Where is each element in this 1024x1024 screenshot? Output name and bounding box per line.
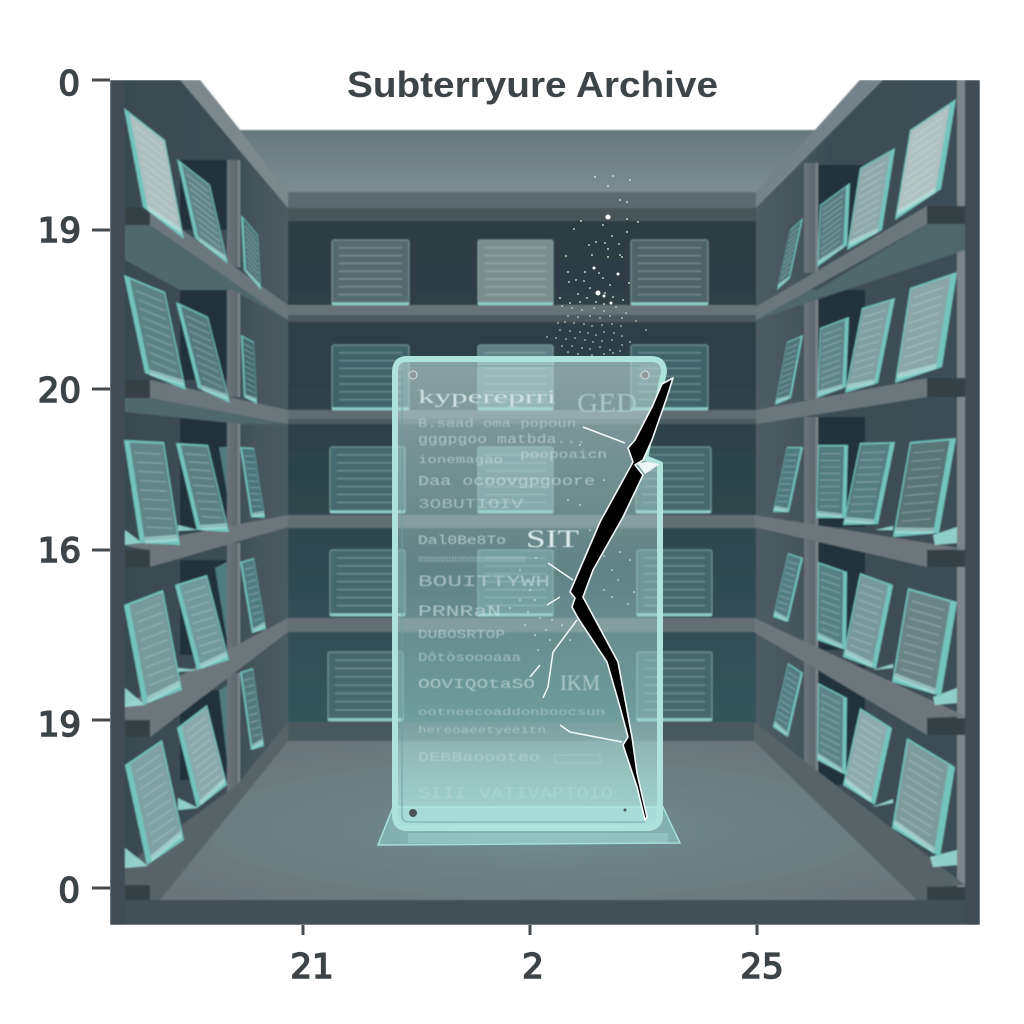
y axis labels and ticks: 20 xyxy=(38,371,81,411)
white shard xyxy=(637,462,660,474)
left shelves xyxy=(125,207,288,900)
engraved text: Dal0Be8To xyxy=(418,533,506,548)
ceiling xyxy=(240,130,815,192)
plaques: left stacks xyxy=(124,108,266,865)
plaques: right stacks xyxy=(773,99,957,857)
x axis labels and ticks: 21 xyxy=(290,947,334,987)
room silhouette xyxy=(110,80,980,925)
floor xyxy=(160,741,917,900)
engraved text: 3OBUTIOIV xyxy=(418,497,524,513)
y axis labels and ticks: 19 xyxy=(38,705,81,745)
engraved text: hereoaeetyeeitn xyxy=(418,725,546,737)
x axis labels and ticks: 2 xyxy=(522,947,544,987)
y axis labels and ticks xyxy=(38,64,110,911)
engraved text: PRNRaN xyxy=(418,603,501,621)
back shelves xyxy=(288,305,756,741)
left side wall xyxy=(125,80,288,900)
y axis labels and ticks: 0 xyxy=(58,64,80,104)
left frame post xyxy=(110,80,125,925)
title: Subterryure Archive xyxy=(347,64,718,105)
engraved text: mmmmmmmmmmmmm xyxy=(418,555,526,566)
y axis labels and ticks: 0 xyxy=(58,871,80,911)
dark bay patches xyxy=(180,160,865,785)
plaque base glows xyxy=(125,525,957,868)
engraved text: B.saad oma popoun xyxy=(418,417,576,431)
hairline cracks xyxy=(530,427,625,742)
engraved text: DEBBaoooteo xyxy=(418,750,540,765)
engraved text: BOUITTYWH xyxy=(418,573,550,591)
plaques: back wall xyxy=(328,240,712,721)
dust particles rising from the crack xyxy=(547,176,646,355)
base of the central plaque xyxy=(378,807,680,845)
x axis labels and ticks: 25 xyxy=(740,947,784,987)
screws xyxy=(409,371,649,817)
right side wall xyxy=(756,80,957,900)
engraved text: gggpgoo matbda... xyxy=(418,432,586,447)
engraved text: Dôtòsoooaaa xyxy=(418,651,521,665)
engraved text: OOVIQOtaSO xyxy=(418,677,535,693)
engraved text: poopoaicn xyxy=(520,448,607,462)
engraved text: IKM xyxy=(560,670,600,695)
ceiling strips xyxy=(180,80,883,221)
frame bottom band xyxy=(110,900,980,925)
engraved text: ionemagao xyxy=(418,455,503,467)
engraved text: SIT xyxy=(526,526,579,553)
engraved text: kypereprri xyxy=(418,387,556,408)
y axis labels and ticks: 16 xyxy=(38,531,81,571)
engraved text: DUBOSRTOP xyxy=(418,628,505,642)
right shelves xyxy=(754,206,965,900)
x axis labels and ticks xyxy=(290,925,784,987)
engraved text: ootneecoaddonboocsun xyxy=(418,707,605,719)
y axis labels and ticks: 19 xyxy=(38,211,81,251)
central glass plaque xyxy=(395,359,673,828)
right light strip xyxy=(957,80,965,900)
archive room xyxy=(110,80,980,925)
back wall xyxy=(288,221,756,731)
engraved text xyxy=(418,387,637,804)
right frame post xyxy=(965,80,980,925)
main crack xyxy=(570,378,673,820)
glass body xyxy=(395,359,664,828)
engraved text: SIII VATIVAPTOIO xyxy=(418,785,613,804)
inner edge xyxy=(402,366,645,822)
engraved text: GED xyxy=(577,388,637,418)
left and right uprights xyxy=(227,160,818,798)
engraved text: Daa ocoovgpgoore xyxy=(418,474,595,490)
glass shards in plaque xyxy=(510,445,634,650)
